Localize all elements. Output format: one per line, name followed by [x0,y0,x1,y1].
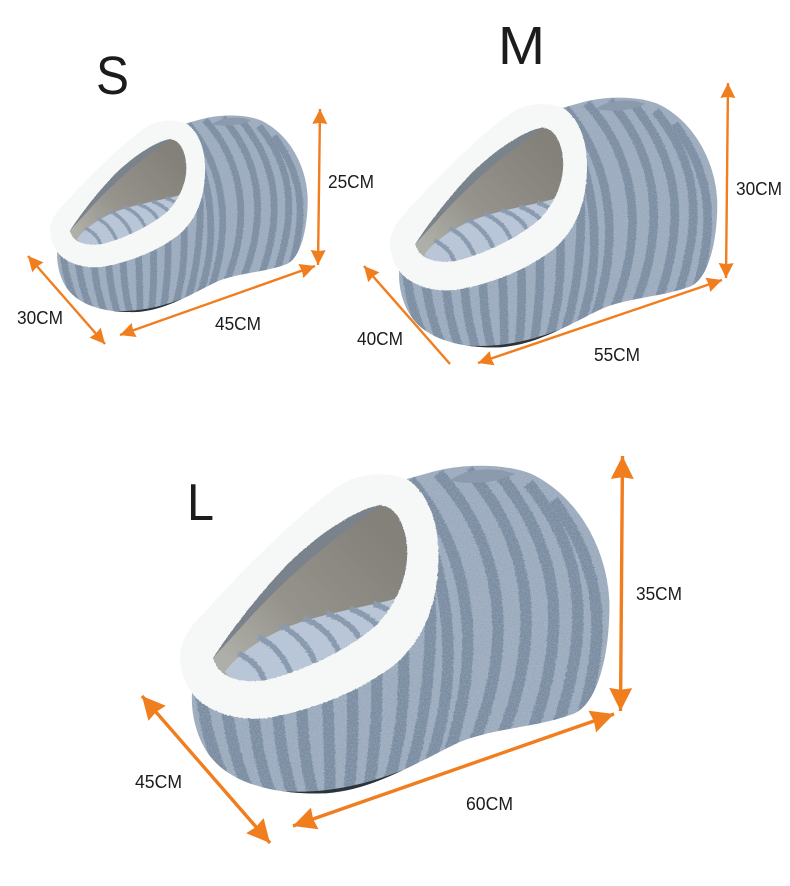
size label: M: M [498,16,545,76]
dimension: S height: 25CM [328,172,374,192]
arrow: S height [318,109,320,265]
arrow: M height [726,83,728,278]
pet bed: medium [382,86,725,355]
dimension: S width: 30CM [17,308,63,328]
dimension: L height: 35CM [636,584,682,604]
arrow: M width [364,266,450,364]
arrow: M length [478,280,722,363]
arrow: L height [620,456,622,711]
pet bed: large [170,450,620,803]
arrow: L width [142,696,270,843]
dimension: L width: 45CM [135,772,182,792]
size label: S: S [96,46,129,106]
dimension: M length: 55CM [594,345,640,365]
arrow: L length [293,714,614,826]
arrow: S width [28,256,105,344]
dimension: M width: 40CM [357,329,403,349]
dimension: L length: 60CM [466,794,513,814]
size label: L: L [187,474,214,532]
dimension: S length: 45CM [215,314,261,334]
dimension: M height: 30CM [736,179,782,199]
arrow: S length [120,266,315,335]
pet bed: small [44,106,314,318]
